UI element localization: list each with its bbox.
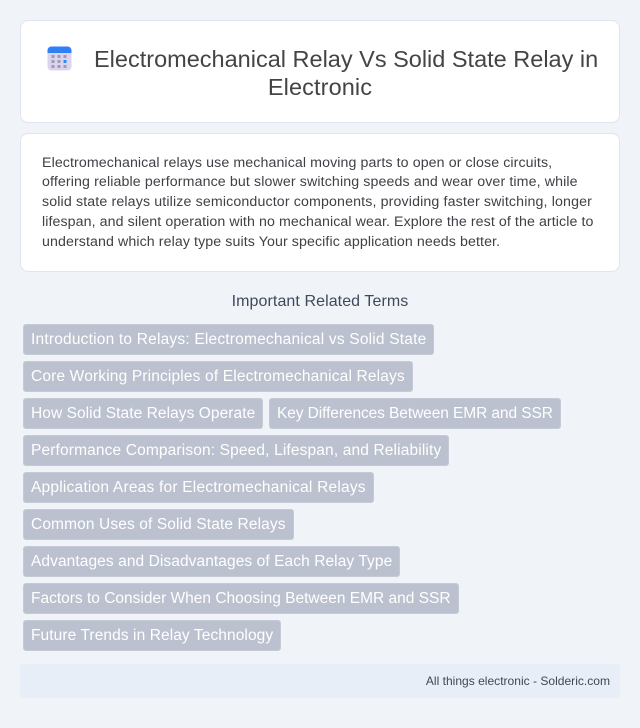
tag xyxy=(23,472,374,503)
tag: How Solid State Relays Operate xyxy=(31,405,255,422)
summary text: Electromechanical relays use mechanical moving parts to open or close circuits, xyxy=(42,155,552,171)
heading: important related terms: Important Related Terms xyxy=(232,293,408,310)
tag: Future Trends in Relay Technology xyxy=(31,627,273,644)
summary text xyxy=(42,155,593,250)
tag: Key Differences Between EMR and SSR xyxy=(277,405,553,422)
tag xyxy=(23,583,459,614)
summary text: offering reliable performance but slower switching speeds and wear over time, while xyxy=(42,174,578,190)
summary text: solid state relays utilize semiconductor components, providing faster switching, longer xyxy=(42,194,592,210)
tag xyxy=(23,361,413,392)
tag xyxy=(23,509,294,540)
tag xyxy=(23,546,400,577)
summary text: lifespan, and silent operation with no mechanical wear. Explore the rest of the article to xyxy=(42,214,593,230)
footer text: All things electronic - Solderic.com xyxy=(426,674,610,688)
tag: Common Uses of Solid State Relays xyxy=(31,516,286,533)
tag: Advantages and Disadvantages of Each Relay Type xyxy=(31,553,392,570)
tag xyxy=(23,435,449,466)
tag: Introduction to Relays: Electromechanical vs Solid State xyxy=(31,331,426,348)
footer bar xyxy=(20,664,620,698)
title: Electromechanical Relay Vs Solid State Relay in xyxy=(94,46,598,72)
tag: Performance Comparison: Speed, Lifespan, and Reliability xyxy=(31,442,441,459)
title xyxy=(94,46,598,100)
tag xyxy=(23,324,434,355)
summary text: understand which relay type suits Your specific application needs better. xyxy=(42,234,500,250)
tag: Application Areas for Electromechanical Relays xyxy=(31,479,366,496)
tag xyxy=(23,398,263,429)
tag: Factors to Consider When Choosing Between EMR and SSR xyxy=(31,590,451,607)
tag: Core Working Principles of Electromechanical Relays xyxy=(31,368,405,385)
tag xyxy=(269,398,561,429)
tag xyxy=(23,620,281,651)
header card xyxy=(20,20,620,123)
summary card xyxy=(20,133,620,272)
icon: calendar grid xyxy=(48,46,72,70)
related term tags xyxy=(23,324,561,651)
title: Electronic xyxy=(268,74,372,100)
